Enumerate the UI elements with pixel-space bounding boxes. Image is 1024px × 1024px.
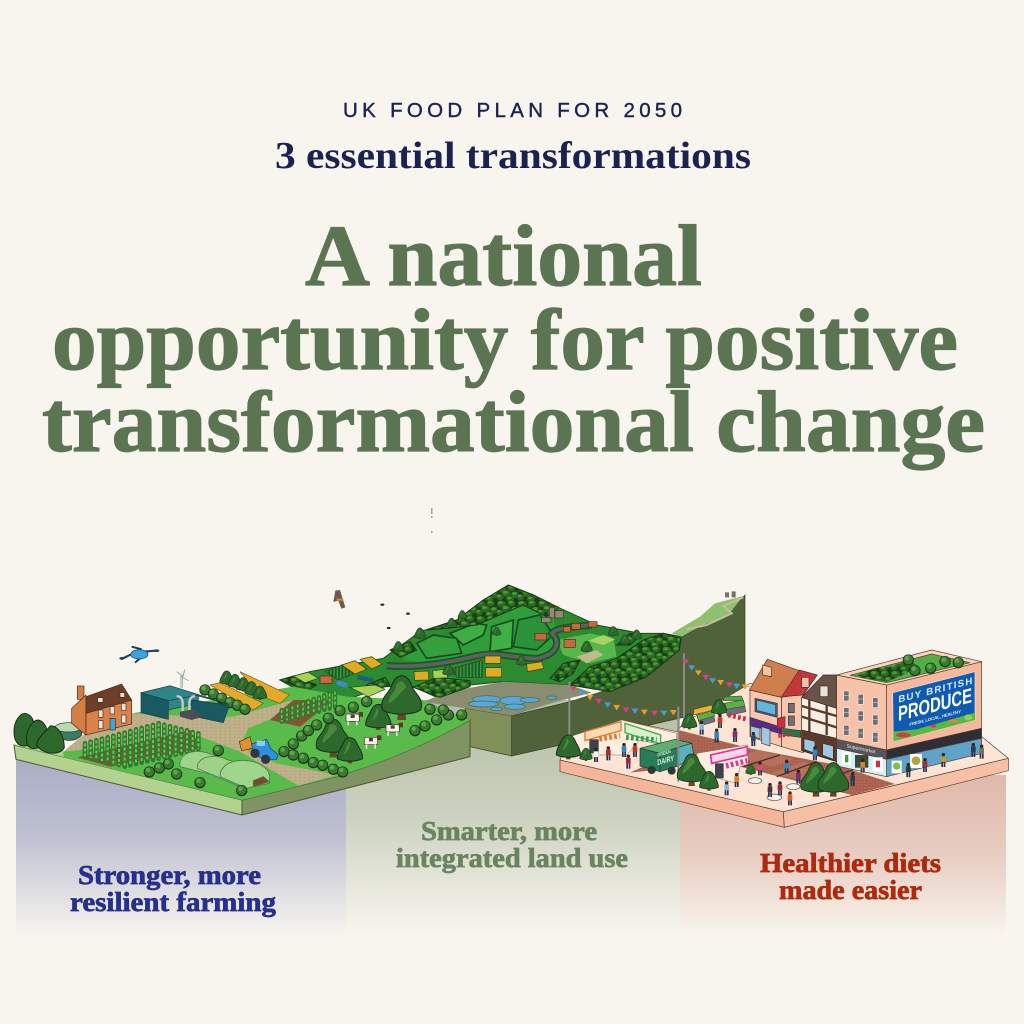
label: farming: Stronger, more	[78, 860, 261, 890]
truck lettering	[657, 748, 674, 767]
teal barns	[141, 686, 228, 723]
platform right side	[783, 758, 1008, 827]
supermarket building	[837, 650, 982, 777]
hill back wall	[512, 595, 745, 756]
pond block side	[465, 708, 512, 756]
market back wall	[570, 720, 677, 755]
brick plaza	[630, 730, 895, 795]
silo	[55, 723, 82, 740]
platform right side slope	[242, 720, 470, 815]
farmyard track	[63, 700, 337, 786]
illustration: high street platform	[556, 650, 1008, 827]
cafe tables	[748, 778, 800, 801]
stall awning green	[626, 737, 657, 740]
billboard: PRODUCE	[898, 684, 972, 726]
hill houses	[320, 607, 597, 683]
woodland	[280, 585, 681, 697]
headline: A national	[305, 207, 702, 304]
yellow fields	[210, 672, 289, 710]
building roof rim	[837, 650, 982, 685]
small vehicles	[336, 675, 374, 688]
pink shop board	[715, 763, 724, 778]
birds	[380, 603, 410, 629]
panel: diets gradient	[680, 775, 1006, 937]
row house two	[777, 670, 817, 753]
wind turbine	[177, 669, 189, 687]
barn pipes	[177, 696, 195, 713]
platform strip	[14, 743, 242, 800]
label: diets: Healthier diets	[760, 848, 941, 878]
farmhouse	[72, 684, 132, 735]
pink awning	[726, 761, 747, 766]
platform left side	[560, 760, 784, 827]
building right face	[887, 662, 982, 750]
platform top surface	[14, 687, 470, 800]
crop field	[77, 723, 202, 767]
label: diets: made easier	[779, 875, 922, 905]
windows	[843, 691, 878, 743]
headline: opportunity for positive	[52, 291, 958, 388]
barn unit	[180, 709, 203, 720]
supermarket sign: Supermarket	[847, 743, 876, 756]
timber house	[802, 675, 837, 762]
hill trees	[393, 610, 642, 676]
pink shop sign	[711, 747, 747, 763]
eyebrow: UK FOOD PLAN FOR 2050	[343, 99, 682, 122]
road	[387, 625, 592, 666]
bunting two	[682, 659, 750, 690]
tractor	[239, 737, 278, 764]
headline	[42, 207, 985, 470]
platform top	[560, 683, 1008, 812]
shoppers	[594, 714, 984, 805]
farm trees	[14, 713, 64, 753]
platform front side	[14, 745, 242, 815]
hill top track	[687, 597, 743, 629]
billboard: BUY BRITISH	[898, 676, 972, 706]
panel: farming gradient	[16, 757, 346, 937]
label: land use: Smarter, more	[421, 816, 597, 846]
roof shrubs	[855, 654, 964, 682]
illustration: hill and pond	[280, 585, 745, 756]
bright grass fields	[403, 607, 617, 663]
stall counter	[589, 739, 599, 753]
bunting one	[570, 686, 678, 716]
polytunnel	[180, 751, 270, 788]
row house one	[749, 659, 799, 747]
hill top stones	[725, 591, 736, 597]
cows	[346, 712, 403, 749]
pond land	[423, 682, 592, 716]
illustration: farm platform	[14, 647, 470, 815]
subtitle: 3 essential transformations	[275, 135, 751, 177]
stall sign orange	[585, 722, 621, 741]
shop glazing right	[887, 738, 982, 777]
stall awning orange	[599, 736, 620, 739]
label: farming: resilient farming	[70, 887, 277, 917]
billboard	[893, 672, 975, 742]
shop glazing left	[837, 748, 887, 777]
truck lettering: DAIRY	[657, 754, 674, 767]
truck lettering: GREEN	[657, 749, 671, 759]
hill top path	[672, 596, 743, 637]
icon: drone	[119, 647, 159, 663]
upper crop field	[270, 692, 335, 727]
hill fields	[293, 656, 544, 697]
stall sign green	[625, 723, 661, 744]
label: land use: integrated land use	[396, 843, 628, 873]
building left face	[837, 675, 887, 750]
pasture hedges	[278, 696, 467, 778]
field trees	[199, 671, 267, 715]
produce stalls	[693, 696, 747, 726]
roof garden	[850, 654, 970, 683]
pink shop	[697, 745, 748, 783]
stray marks	[431, 508, 432, 533]
market trees	[556, 700, 849, 797]
header	[275, 99, 751, 177]
field hedges	[144, 745, 247, 796]
billboard: FRESH, LOCAL, HEALTHY	[909, 709, 961, 727]
truck	[640, 739, 694, 774]
pond water	[468, 696, 557, 711]
hill surface	[280, 585, 682, 703]
bird of prey	[333, 590, 345, 609]
shopfront fascia right	[887, 728, 982, 759]
panel: land use gradient	[346, 700, 680, 937]
shop window displays	[842, 752, 922, 773]
headline: transformational change	[42, 373, 985, 470]
bunting poles	[568, 653, 685, 782]
pasture trees	[316, 676, 422, 763]
shopfront fascia left	[837, 739, 887, 759]
